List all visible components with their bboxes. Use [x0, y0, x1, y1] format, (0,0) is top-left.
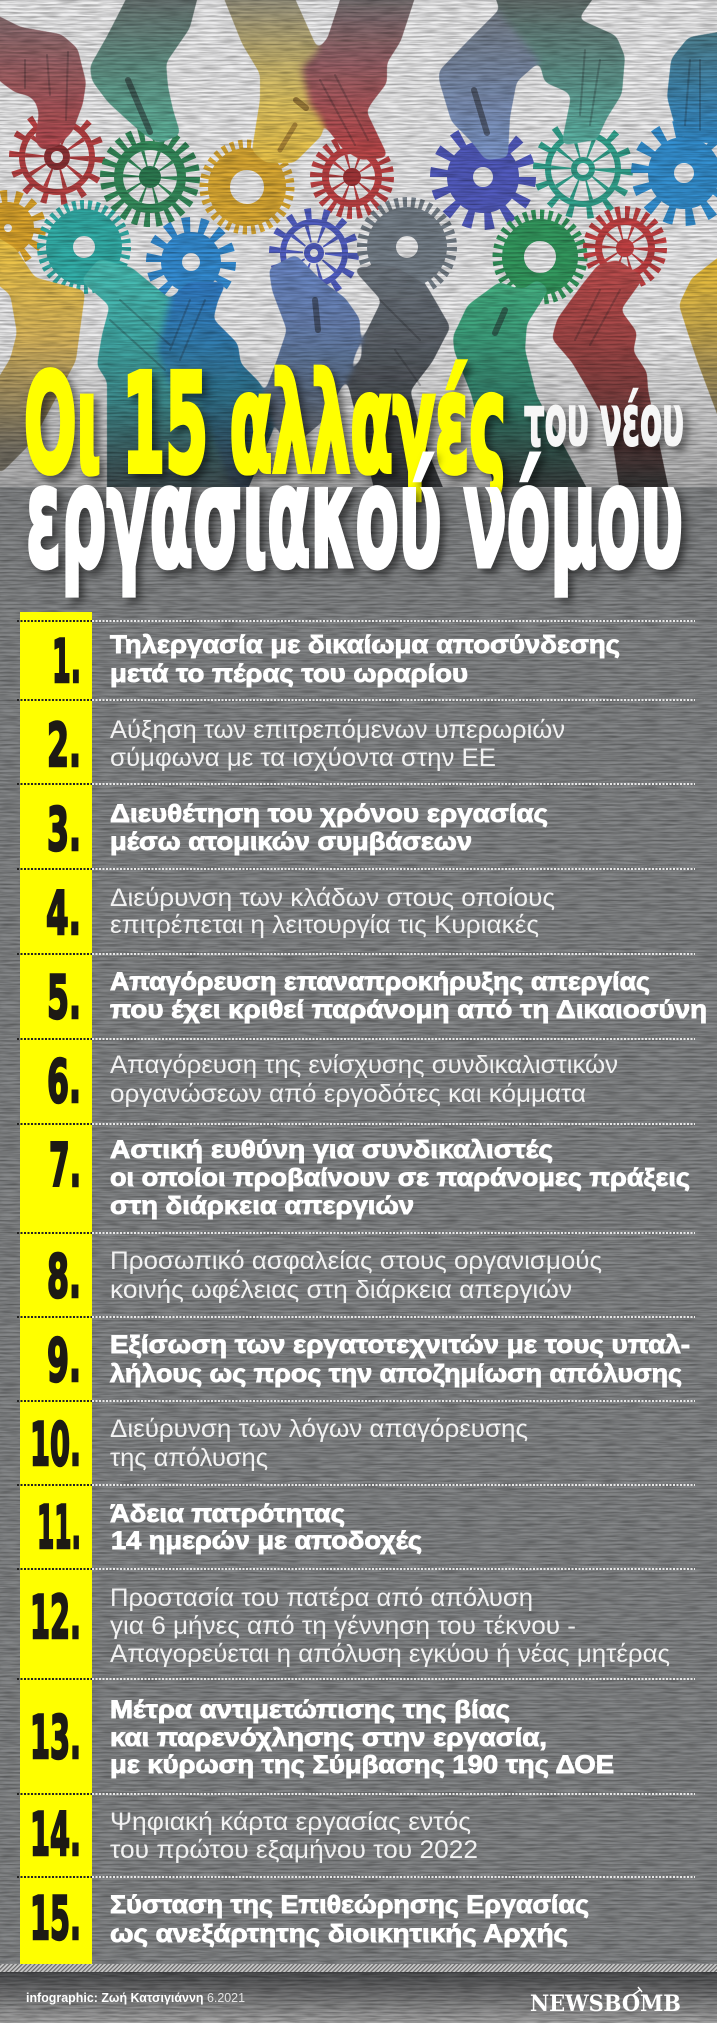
- text 10: Διεύρυνση των λόγων απαγόρευσης: [110, 1415, 528, 1443]
- text 4: Διεύρυνση των κλάδων στους οποίους: [110, 884, 555, 912]
- item 1: [52, 627, 620, 697]
- icon: bomb fuse: [633, 1987, 642, 1995]
- item 4: [46, 879, 555, 949]
- text 3: [110, 800, 548, 856]
- item 8: [47, 1242, 602, 1312]
- text 4: [110, 884, 555, 939]
- yellow number column: [20, 612, 92, 1970]
- icon: blue gear right: [640, 129, 717, 217]
- item 10: [30, 1410, 528, 1480]
- text 3: Διευθέτηση του χρόνου εργασίας: [110, 800, 548, 828]
- number 6: 6.: [47, 1047, 81, 1117]
- text 5: που έχει κριθεί παράνομη από τη Δικαιοσύνη: [110, 996, 707, 1024]
- text 4: επιτρέπεται η λειτουργία τις Κυριακές: [110, 911, 539, 939]
- icon: indigo spoked gear: [274, 214, 354, 292]
- text 2: Αύξηση των επιτρεπόμενων υπερωριών: [110, 716, 565, 744]
- text 9: λήλους ως προς την αποζημίωση απόλυσης: [110, 1360, 682, 1388]
- text 13: Μέτρα αντιμετώπισης της βίας: [110, 1696, 510, 1724]
- item 11: [37, 1493, 422, 1563]
- item 13: 13.: [30, 1703, 81, 1773]
- text 12: [110, 1584, 670, 1668]
- item 3: [47, 795, 548, 865]
- icon: green spoked gear: [108, 134, 192, 220]
- icon: teal gear: [42, 206, 126, 288]
- text 6: [110, 1051, 618, 1108]
- item 5: [47, 963, 707, 1033]
- item 14: 14.: [30, 1800, 81, 1870]
- text 11: Άδεια πατρότητας: [110, 1500, 345, 1528]
- text 8: [110, 1247, 602, 1304]
- text 13: με κύρωση της Σύμβασης 190 της ΔΟΕ: [110, 1751, 614, 1779]
- text 7: [110, 1136, 690, 1220]
- text 14: [110, 1808, 478, 1864]
- text 7: Αστική ευθύνη για συνδικαλιστές: [110, 1136, 553, 1164]
- text 1: μετά το πέρας του ωραρίου: [110, 660, 468, 688]
- number 4: 4.: [46, 879, 81, 949]
- text 2: [110, 716, 565, 772]
- text 2: σύμφωνα με τα ισχύοντα στην ΕΕ: [110, 744, 496, 772]
- item 7: 7.: [49, 1131, 81, 1201]
- item 15: [30, 1884, 589, 1954]
- text 3: μέσω ατομικών συμβάσεων: [110, 828, 472, 856]
- text 8: Προσωπικό ασφαλείας στους οργανισμούς: [110, 1247, 602, 1275]
- item 10: 10.: [30, 1410, 81, 1480]
- text 1: Τηλεργασία με δικαίωμα αποσύνδεσης: [110, 631, 620, 659]
- icon: red spoked gear right: [590, 213, 660, 283]
- text 11: 14 ημερών με αποδοχές: [111, 1527, 422, 1555]
- icon: mustard gear at left edge: [0, 197, 39, 259]
- icon: small red spoked gear: [317, 142, 387, 212]
- text 6: Απαγόρευση της ενίσχυσης συνδικαλιστικών: [110, 1051, 618, 1079]
- finger shadow marks: [25, 50, 700, 385]
- item 12: 12.: [30, 1583, 81, 1653]
- credit line: infographic: Ζωή Κατσιγιάννη 6.2021: [26, 1990, 245, 2005]
- fade of hero into grey: [0, 340, 717, 490]
- title: [24, 346, 684, 600]
- text 9: [110, 1331, 690, 1388]
- number 2: 2.: [47, 711, 81, 781]
- text 13: και παρενόχλησης στην εργασία,: [110, 1724, 547, 1752]
- dotted separators on grey: [92, 621, 695, 1877]
- hands from the bottom: [0, 235, 717, 500]
- dotted separators on yellow: [17, 621, 92, 1877]
- grey page background: [0, 487, 717, 1964]
- text 7: στη διάρκεια απεργιών: [110, 1192, 414, 1220]
- item 9: [47, 1326, 690, 1396]
- text 14: Ψηφιακή κάρτα εργασίας εντός: [110, 1808, 471, 1836]
- footer background: [0, 1972, 717, 2023]
- icon: grey gear: [363, 203, 451, 291]
- text 6: οργανώσεων από εργοδότες και κόμματα: [110, 1080, 586, 1108]
- text 9: Εξίσωση των εργατοτεχνιτών με τους υπαλ-: [110, 1331, 690, 1359]
- icon: indigo gear: [439, 133, 527, 221]
- number 5: 5.: [47, 963, 81, 1033]
- text 12: Προστασία του πατέρα από απόλυση: [110, 1584, 533, 1612]
- item 6: [47, 1047, 618, 1117]
- text 15: Σύσταση της Επιθεώρησης Εργασίας: [110, 1891, 589, 1919]
- text 5: [110, 968, 707, 1024]
- number 8: 8.: [47, 1242, 81, 1312]
- item 1: 1.: [52, 627, 81, 697]
- number 9: 9.: [47, 1326, 81, 1396]
- item 14: [30, 1800, 478, 1870]
- item 7: [49, 1131, 690, 1220]
- text 10: [110, 1415, 528, 1472]
- text 11: [110, 1500, 422, 1555]
- item 2: [47, 711, 565, 781]
- text 12: Απαγορεύεται η απόλυση εγκύου ή νέας μητέρας: [110, 1640, 670, 1668]
- icon: blue gear: [154, 225, 228, 299]
- icon: teal spoked gear: [540, 126, 626, 212]
- hands from the top: [0, 0, 717, 160]
- item 11: 11.: [37, 1493, 81, 1563]
- item 13: [30, 1696, 614, 1779]
- text 15: [110, 1891, 589, 1948]
- item 12: [30, 1583, 670, 1668]
- text 7: οι οποίοι προβαίνουν σε παράνομες πράξεις: [110, 1164, 690, 1192]
- text 10: της απόλυσης: [110, 1444, 268, 1472]
- icon: mustard gear: [205, 145, 289, 229]
- text 15: ως ανεξάρτητης διοικητικής Αρχής: [110, 1920, 568, 1948]
- text 5: Απαγόρευση επαναπροκήρυξης απεργίας: [110, 968, 650, 996]
- text 14: του πρώτου εξαμήνου του 2022: [110, 1836, 478, 1864]
- item 15: 15.: [30, 1884, 81, 1954]
- icon: green gear: [498, 215, 582, 299]
- text 8: κοινής ωφέλειας στη διάρκεια απεργιών: [110, 1276, 572, 1304]
- footer hatched band: [0, 1964, 717, 1972]
- logo: NEWSBOMB: NEWSBOMB: [530, 1991, 681, 2017]
- text 13: [110, 1696, 614, 1779]
- text 1: [110, 631, 620, 688]
- text 12: για 6 μήνες από τη γέννηση του τέκνου -: [110, 1612, 576, 1640]
- icon: red spoked gear: [14, 114, 100, 200]
- hero illustration: hands holding gears: [0, 0, 717, 500]
- number 3: 3.: [47, 795, 81, 865]
